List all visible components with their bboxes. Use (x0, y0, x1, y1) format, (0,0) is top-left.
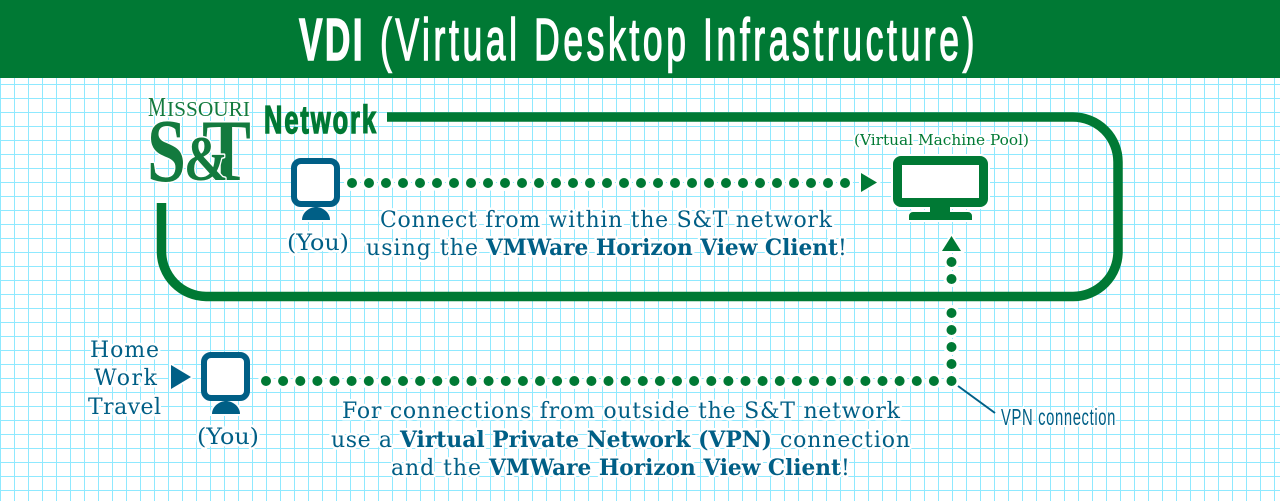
label: virtual machine pool: (Virtual Machine Pool) (854, 131, 1029, 149)
icon: user monitor inside network (294, 161, 337, 220)
text: connections from outside network: use a (331, 428, 392, 453)
label: home, work, travel: Home (90, 338, 159, 363)
label: home, work, travel: Travel (88, 395, 161, 420)
Missouri S&T logo (147, 92, 251, 201)
Missouri S&T logo: ISSOURI (167, 97, 250, 121)
text: connect from within network: Connect from within the S&T network (380, 208, 833, 233)
VPN callout leader line (958, 386, 995, 413)
arrow: into remote user monitor (171, 365, 191, 389)
title: VDI: VDI (299, 7, 365, 73)
Missouri S&T logo: S (147, 102, 186, 201)
text: connections from outside network: ! (841, 456, 850, 481)
arrow: up to virtual machine pool (942, 236, 961, 251)
text: connect from within network: ! (838, 236, 847, 261)
text: connect from within network: using the (366, 236, 478, 261)
network heading: Network (264, 99, 378, 142)
icon: remote user monitor (204, 355, 247, 414)
label: VPN connection: VPN connection (1001, 404, 1116, 430)
text: connections from outside network: connection (780, 428, 910, 453)
label: you outside network: (You) (197, 425, 259, 450)
text: connections from outside network (331, 399, 910, 481)
text: connect from within network (366, 208, 847, 261)
Missouri S&T logo: T (202, 103, 251, 200)
network boundary frame (161, 117, 1118, 296)
text: connect from within network: VMWare Horizon View Client (485, 235, 839, 261)
dotted connection: inside network (347, 178, 850, 188)
icon: virtual machine monitor (893, 156, 988, 220)
Missouri S&T logo: M (148, 92, 166, 122)
label: home, work, travel: Work (94, 366, 158, 391)
text: connections from outside network: VMWare Horizon View Client (488, 455, 842, 481)
dotted connection: outside network via VPN (261, 257, 956, 386)
Missouri S&T logo: & (184, 123, 228, 194)
title banner (0, 0, 1280, 78)
text: connections from outside network: Virtual Private Network (VPN) (399, 427, 772, 453)
arrow: into virtual machine pool (861, 173, 877, 192)
text: connections from outside network: and the (391, 456, 481, 481)
label: home, work, travel (88, 338, 161, 420)
text: connections from outside network: For connections from outside the S&T network (342, 399, 901, 424)
label: you inside network: (You) (287, 231, 349, 256)
